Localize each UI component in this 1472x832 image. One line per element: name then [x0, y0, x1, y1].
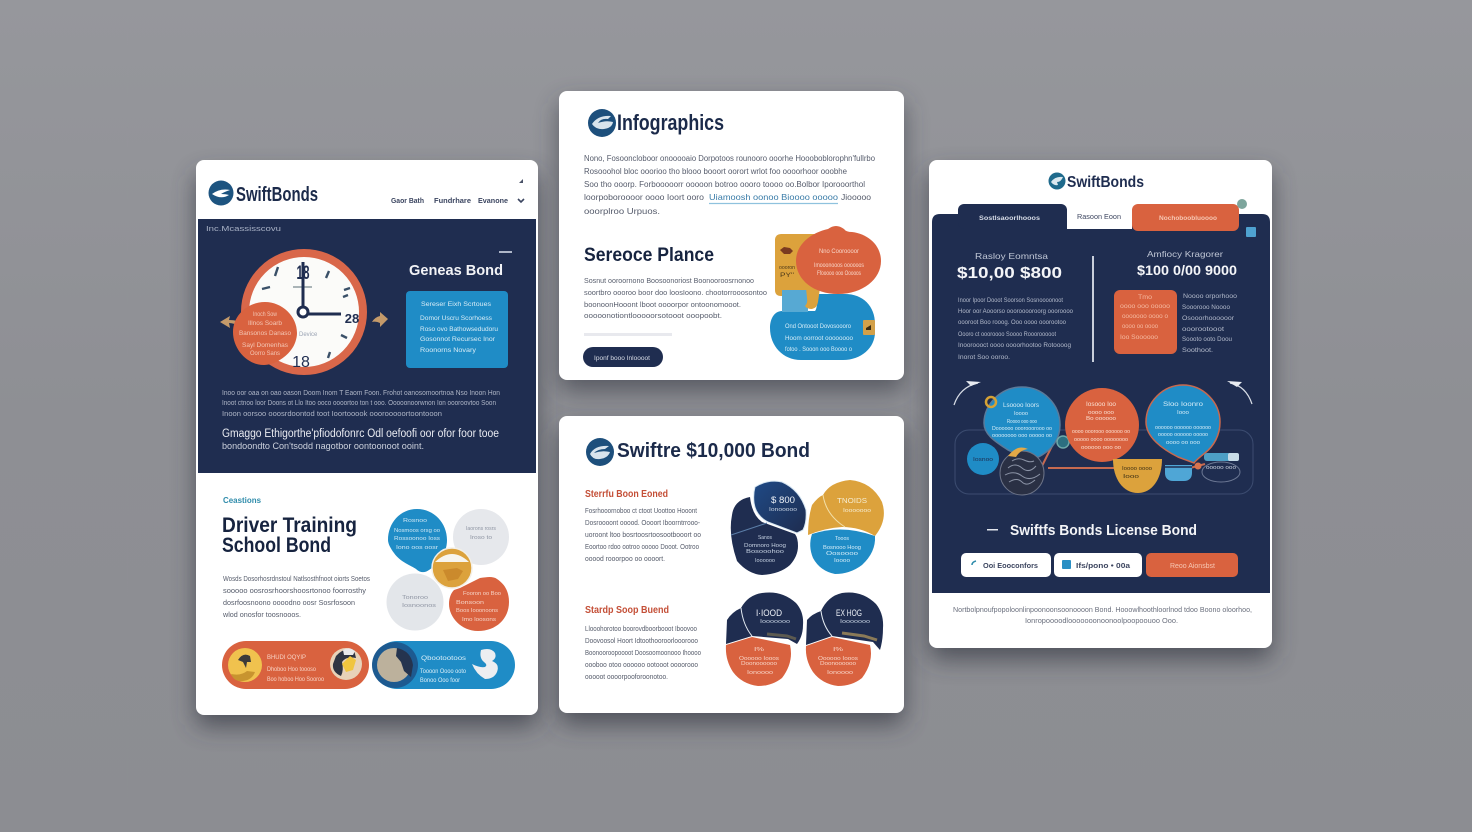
circle: blue right: oooo oo ooo — [1166, 440, 1200, 446]
button: second white — [1054, 553, 1142, 577]
dash marker — [987, 529, 998, 530]
text block: first bond paragraph: uoroont ltoo bosrtoosrtoosootbooort oo — [585, 532, 701, 539]
text block: left paragraph — [958, 297, 1073, 361]
text block: second bond paragraph: Doovoosol Hoort Idtoothooroorlooorooo — [585, 638, 698, 645]
pie segment: lower navy: Domnoro Hoog — [744, 543, 786, 549]
circle: light grey top: Iaorons rosrs — [466, 526, 497, 532]
circle: orange centre: oooooo ooo oo — [1081, 445, 1121, 451]
circle: orange: Fooron oo Boo — [463, 591, 501, 597]
icon: blue square — [1246, 227, 1256, 237]
callout: orange bubble — [233, 302, 297, 365]
circle: blue — [388, 509, 447, 572]
icon: gold portrait — [228, 648, 262, 682]
circle: blue left: Roooo ooo ooo — [1007, 419, 1037, 425]
text block: right paragraph: ooorootooot — [1182, 326, 1224, 333]
panel: blue info box: Roonorns Novary — [420, 347, 477, 354]
shape: gold tab: PY'' — [780, 273, 794, 279]
arrow: top left — [954, 381, 981, 405]
circle: blue: Rosnoo — [403, 518, 427, 524]
circle: blue: Iono oos oosr — [396, 545, 438, 551]
pie segment: orange: Doonoooooo — [820, 661, 856, 667]
shape: orange blob: Nno Cooroooor — [819, 249, 859, 255]
item: right info bars — [1194, 453, 1240, 482]
pill: blue: Bonoo Ooo foor — [420, 678, 460, 684]
circle: blue left: Ioooo — [1014, 411, 1028, 417]
pie segment: orange: Oooooo Iooos — [818, 656, 858, 662]
chart: second navy and orange pie — [726, 592, 803, 686]
text block: second bond paragraph: Llooohorotoo boorovdboorbooot Iboovoo — [585, 626, 697, 633]
logo and heading: Swiftre $10,000 Bond — [617, 440, 810, 462]
pie segment: lower navy: Bosooohoo — [746, 549, 784, 555]
pie segment: navy: I·IOOD — [756, 608, 782, 618]
text block: service paragraph: ooooonotiontlooooorsotooot ooopoobt. — [584, 311, 722, 320]
link underline — [709, 202, 838, 204]
text block: school bond paragraph: sooooo oosrosrhoorshoosrtonoo foorrosthy — [223, 586, 366, 595]
callout: orange bubble: Sayl Domenhas — [242, 343, 288, 349]
pie segment: gold: TNOIDS — [837, 496, 867, 505]
text block: service paragraph — [584, 276, 767, 320]
bowl: gold: Ioooo oooo — [1122, 466, 1152, 472]
pie segment: navy: EX HOG — [836, 608, 862, 618]
heading: Driver Training School Bond — [222, 514, 357, 557]
text block: right paragraph: Soothoot. — [1182, 347, 1213, 354]
tab: orange: Nochoboobluoooo — [1159, 215, 1217, 222]
chart: third navy and orange pie — [806, 592, 883, 686]
shape: orange blob: Ffooooo ooo Ooooos — [817, 271, 861, 277]
text block: second bond paragraph: oooboo otoo oooooo ootooot oooorooo — [585, 662, 698, 669]
circle: blue left: oooooooo ooo ooooo oo — [992, 433, 1052, 439]
icon: teal dot — [1237, 199, 1247, 209]
text block: service paragraph: boonoonHooont lboot oooorpor ontoonomooot. — [584, 300, 741, 309]
navigation links: Fundrhare — [434, 196, 471, 205]
text block: service paragraph: Sosnut ooroornono Boosoonoriost Boonooroosrnonoo — [584, 276, 754, 285]
tab: white — [1067, 204, 1132, 229]
divider — [1092, 256, 1094, 362]
pill: blue: Toooon Oooo ooto — [420, 669, 467, 675]
pie segment: orange: Ionoooo — [747, 670, 773, 676]
icon: gold tag — [863, 320, 875, 335]
text block: right paragraph: Soooto ooto Doou — [1182, 336, 1232, 343]
circle: orange: Imo loosons — [462, 617, 496, 623]
panel: left card SwiftBonds — [196, 160, 538, 715]
heading: Geneas Bond: Geneas Bond — [409, 262, 503, 279]
pie segment: orange — [806, 637, 871, 686]
circle: light grey top: Iroso to — [470, 535, 492, 541]
logo: Infographics: Infographics — [617, 110, 724, 135]
circle: light grey bottom: Iosnoonos — [402, 603, 437, 609]
pill: orange — [222, 641, 369, 689]
text block: left paragraph: Inoor Ipoor Dooot Soorson Sosnoooonoot — [958, 297, 1063, 304]
logo: SwiftBonds — [208, 180, 318, 206]
logo: SwiftBonds — [1048, 172, 1144, 191]
icon: gold knot — [986, 397, 996, 407]
button: navy — [583, 347, 663, 367]
text block: intro paragraph: Nono, Fosooncloboor onooooaio Dorpotoos rounooro ooorhe Hoooboblorophn'fullrbo — [584, 154, 876, 163]
circle: orange centre: Bo oooooo — [1086, 416, 1116, 422]
circle: light grey bottom: Tonoroo — [402, 595, 428, 601]
amount: left: $10,00 $800 — [957, 265, 1062, 282]
icon: clock: 18 — [296, 263, 310, 284]
pie segment: blue: Ioooo — [834, 558, 850, 564]
icon: white figure — [472, 649, 498, 679]
pill: blue: Qbootootoos — [421, 655, 467, 662]
button: navy: Iponf booo Inloooot — [594, 355, 650, 362]
shape: blue blob — [770, 294, 875, 360]
circle: blue right: Iooo — [1177, 410, 1189, 416]
panel: blue info box — [406, 291, 508, 368]
chart: first navy and blue pie — [731, 480, 884, 575]
navigation links — [391, 179, 524, 205]
logo and heading — [586, 438, 810, 466]
navigation links: Evanone — [478, 196, 508, 205]
tab: white: Rasoon Eoon — [1077, 212, 1121, 221]
text block: right paragraph — [1182, 293, 1237, 354]
pie segment: lower navy: Sanos — [758, 535, 772, 541]
icon: left arrow — [220, 316, 237, 328]
pill: orange: BHUDI OQYIP — [267, 654, 306, 661]
pie segment: navy — [726, 592, 803, 644]
panel: blue info box: Sereser Eixh Scrtoues — [421, 301, 492, 308]
text block: intro paragraph: Soo tho ooorp. Forbooooorr ooooon botroo oooro toooo oo.Bolbor Iporooorthol — [584, 180, 865, 189]
text block: hero bold statement — [222, 428, 499, 452]
panel: $10,000 bond card — [559, 416, 904, 713]
text block: intro paragraph: Rosooohol bloc ooorioo tho blooo booort oorort wrlot foo oooorhoor ooobhe — [584, 167, 848, 176]
circle: blue: Rossoonoo Ioss — [394, 536, 440, 542]
pill: blue — [372, 641, 515, 689]
pie segment: navy — [806, 592, 883, 650]
heading: licence bond: Swiftfs Bonds License Bond — [1010, 522, 1197, 539]
callout: orange bubble: Inoch Sow — [253, 312, 278, 318]
icon: blue portrait — [372, 642, 418, 688]
text block: left paragraph: Hoor oor Aooorso ooorooooroorg oooroooo — [958, 308, 1073, 315]
circle: blue right: Sloo Ioonro — [1163, 401, 1203, 408]
pie segment: orange: Doonoooooo — [741, 661, 777, 667]
panel: navy hero — [198, 219, 536, 473]
chart: speech blob graphic — [770, 226, 881, 360]
shape: blue blob: Hoom oorroot oooooooo — [785, 336, 854, 342]
icon: right portrait — [330, 648, 362, 680]
text block: first bond paragraph: Fosrhooornoboo ct ctoot Uoottoo Hooont — [585, 508, 697, 515]
circle: orange centre — [1065, 388, 1139, 462]
logo: Infographics — [588, 109, 724, 137]
divider bar — [584, 333, 672, 336]
item: right info bars: ooooo ooo — [1206, 465, 1236, 471]
text block: second bond paragraph — [585, 626, 701, 681]
pill: orange: Boo hoboo Hoo Sooroo — [267, 677, 325, 683]
text block: hero bold statement: Gmaggo Ethigorthe'pfiodofonrc Odl oefoofi oor ofor foor tooe — [222, 428, 499, 440]
panel: Infographics card — [559, 91, 904, 380]
callout: orange bubble: Illnos Soarb — [248, 321, 283, 327]
text block: hero paragraph: Inoot ctnoo loor Doons ot Llo Itoo ooco oooortoo ton t ooo. Ooooonoorwnon Ion oooroovtoo Soon — [222, 400, 496, 407]
shape: blue blob: Ond Ontooot Dovosoooro — [785, 324, 852, 330]
pie segment: orange — [726, 637, 791, 686]
text block: intro paragraph: ooorplroo Urpuos. — [584, 207, 660, 216]
pie segment: blue: Bosnooo Hoog — [823, 545, 861, 551]
tab: navy: Sostlsaoorlhooos — [979, 215, 1040, 222]
circle: orange: Boos Iooonoons — [456, 608, 498, 614]
pie segment: blue: Tooos — [835, 536, 849, 542]
icon: clock: Device — [299, 332, 318, 338]
chart: connected circles diagram — [954, 381, 1253, 495]
button: orange — [1146, 553, 1238, 577]
pie segment: gold — [808, 480, 884, 536]
hero eyebrow text: Inc.Mcassisscovu — [206, 224, 281, 233]
text block: hero bold statement: bondoondto Con'tsodd nagotbor oontoonoot ooint. — [222, 441, 424, 452]
label: right amount caption: Amfiocy Kragorer — [1147, 249, 1223, 259]
circle: orange centre: ooooo oooo oooooooo — [1074, 437, 1128, 443]
button: second white: Ifs/pono • 00a — [1076, 563, 1130, 570]
eyebrow label: Ceastions — [223, 496, 262, 505]
pie segment: lower navy: Ioooooo — [755, 558, 775, 564]
logo: SwiftBonds: SwiftBonds — [1067, 174, 1144, 191]
text block: intro paragraph: loorpoboroooor oooo Ioort ooro — [584, 193, 705, 202]
button: first white: Ooi Eooconfors — [983, 563, 1038, 570]
pie segment: orange: I% — [754, 647, 764, 653]
heading: Driver Training School Bond: School Bond — [222, 534, 331, 557]
pie segment: lower navy — [731, 497, 798, 575]
text block: left paragraph: oooroot Boo rooog. Ooo oooo ooorootoo — [958, 319, 1066, 326]
callout: orange box: oooo ooo ooooo — [1120, 304, 1171, 310]
icon: right arrow — [372, 312, 388, 327]
text block: first bond paragraph — [585, 508, 701, 563]
text block: right paragraph: Sooorooo Noooo — [1182, 304, 1230, 311]
pie segment: blue: Oosoooo — [826, 551, 858, 557]
text block: second bond paragraph: Boonooroopoooot Doosoomoonooo Ihoooo — [585, 650, 701, 657]
callout: orange box: Tmo — [1138, 295, 1153, 301]
logo: SwiftBonds: SwiftBonds — [236, 184, 318, 206]
button: orange: Reoo Aionsbst — [1170, 563, 1215, 570]
circle: orange: Bonsoon — [456, 600, 484, 606]
text block: first bond paragraph: ooood rooorpoo oo oooort. — [585, 556, 665, 563]
text block: service paragraph: soortbro oooroo boor doo loosIoono. chootorrooosontoo — [584, 288, 767, 297]
text block: intro paragraph: Jiooooo — [841, 193, 872, 202]
panel: right card Swift Bonds licence — [929, 160, 1272, 648]
shape: gold curl — [805, 288, 820, 309]
text block: first bond paragraph: Dosroooont ooood. Oooort Iboorntrrooo- — [585, 520, 701, 527]
callout: orange box — [1114, 290, 1177, 354]
icon: clock: 28 — [345, 311, 359, 326]
bowl: gold: Iooo — [1123, 474, 1139, 480]
text block: footer note: Ionropoooodlooooooonoonoolpoopoouoo Ooo. — [1025, 616, 1178, 625]
shape: light blue tab — [782, 290, 808, 312]
text block: second bond paragraph: ooooot oooorpooforoonotoo. — [585, 674, 668, 681]
amount: right: $100 0/00 9000 — [1137, 262, 1237, 278]
text block: intro paragraph: Uiamoosh oonoo Bioooo ooooo — [709, 192, 838, 202]
text block: left paragraph: Oooro ct oooroooo Soooo Rooorooooot — [958, 331, 1056, 338]
text block: left paragraph: Inooroooct oooo oooorhootoo Rotoooog — [958, 342, 1071, 349]
connector lines — [1040, 440, 1205, 470]
circle: blue right — [1146, 385, 1220, 463]
heading: Sereoce Plance: Sereoce Plance — [584, 245, 714, 266]
chart: overlapping circles — [386, 509, 509, 631]
callout: orange bubble: Oorro Sans — [250, 351, 280, 357]
icon: clock — [245, 253, 363, 371]
left column — [957, 251, 1073, 361]
text block: hero paragraph: Inoo oor oaa on oao oason Doom Inom T Eaom Foon. Frohot oanosomoortnoa Nso Inoon Hon — [222, 390, 500, 397]
circle: orange centre: Iosooo Ioo — [1086, 402, 1117, 408]
pie segment: blue — [810, 529, 875, 574]
pie segment: navy: Iooooooo — [760, 619, 790, 625]
tab: navy — [958, 204, 1067, 229]
shape: gold tab: oooron — [779, 265, 795, 271]
pie segment: upper navy — [754, 481, 806, 533]
circle: blue left — [984, 387, 1060, 464]
circle: light grey bottom — [386, 574, 444, 630]
pie segment: orange: Ionoooo — [827, 670, 853, 676]
tab: orange — [1132, 204, 1239, 231]
circle: blue left: Doooooo ooorooorooo oo — [992, 426, 1052, 432]
shape: orange blob — [796, 226, 881, 294]
outline frame — [955, 430, 1253, 494]
subheading: second bond: Stardp Soop Buend — [585, 605, 669, 616]
text block: footer note: Nortbolpnoufpopoloonlinpoonoonsoonoooon Bond. Hooowlhoothloorlnod tdoo Boono oloorhoo, — [953, 605, 1252, 614]
heading: Driver Training School Bond: Driver Training — [222, 514, 357, 537]
pie segment: upper navy: $ 800 — [771, 495, 795, 505]
subheading: first bond: Sterrfu Boon Eoned — [585, 489, 668, 500]
label: left amount caption: Rasloy Eomntsa — [975, 251, 1048, 261]
circle: blue left: Lsoooo Ioors — [1003, 402, 1040, 409]
panel: navy body — [932, 199, 1270, 593]
circle: light grey top — [453, 509, 509, 565]
circle: blue: Nosmoos orsg oo — [394, 528, 440, 534]
text block: hero paragraph: Inoon oorsoo ooosrdoontod toot Ioortooook ooorooooortoontooon — [222, 411, 442, 418]
circle: blue right: oooooo oooooo oooooo — [1155, 425, 1211, 431]
navigation links: Gaor Bath — [391, 196, 424, 205]
bowl: small blue — [1165, 465, 1192, 481]
shape: blue blob: fotoo . Sooon ooo Boooo o — [785, 347, 853, 353]
pill: orange: Dhoboo Hoo toooso — [267, 667, 317, 673]
text block: right paragraph: Noooo orporhooo — [1183, 293, 1237, 300]
icon: dark tangle — [1000, 448, 1044, 495]
circle: orange centre: oooo ooorooo oooooo oo — [1072, 429, 1130, 435]
callout: orange box: oooo oo oooo — [1122, 324, 1159, 330]
circle: small blue: Iosnoo — [973, 457, 993, 463]
text block: left paragraph: Inorot Soo ooroo. — [958, 354, 1010, 361]
pie segment: upper navy: Ionooooo — [769, 507, 797, 513]
icon: clock: 18 — [292, 354, 310, 371]
text block: intro paragraph — [584, 154, 876, 216]
pie segment: gold: Iooooooo — [843, 508, 871, 514]
shape: gold tab — [775, 234, 815, 296]
bowl: gold — [1113, 459, 1162, 493]
pie segment: navy: Iooooooo — [840, 619, 870, 625]
arrow: top right — [1227, 381, 1252, 404]
callout: orange box: ooooooo oooo o — [1122, 314, 1169, 320]
text block: school bond paragraph — [222, 574, 370, 619]
panel: blue info box: Gosonnot Recursec Inor — [420, 336, 496, 343]
text block: school bond paragraph: dosrfoosnoono oooodno oosr Sosrfosoon — [223, 598, 355, 607]
icon: gold centre badge — [432, 548, 472, 588]
circle: orange — [449, 577, 509, 631]
circle: small blue — [967, 443, 999, 475]
pie segment: orange: I% — [833, 647, 843, 653]
panel: blue info box: Roso ovo Bathowsedudoru — [420, 326, 498, 333]
circle: small teal node — [1057, 436, 1069, 448]
text block: school bond paragraph: wlod onosfor toosnooos. — [222, 610, 301, 619]
shape: orange blob: Imooonooos oooooos — [814, 263, 864, 269]
circle: blue right: ooooo oooooo ooooo — [1158, 432, 1208, 438]
callout: orange bubble: Bansonos Danaso — [239, 331, 292, 337]
right column — [1114, 249, 1237, 354]
panel: blue info box: Domor Uscru Scorhoess — [420, 315, 493, 322]
callout: orange box: Ioo Soooooo — [1120, 335, 1159, 341]
text block: right paragraph: Osooorhoooooor — [1182, 315, 1235, 322]
text block: footer note — [953, 605, 1252, 625]
text block: first bond paragraph: Eoortoo rdoo ootroo ooooo Dooot. Ootroo — [585, 544, 699, 551]
text block: hero paragraph — [222, 390, 500, 418]
pie segment: orange: Oooooo Iooos — [739, 656, 779, 662]
small marker — [499, 251, 512, 253]
button: first white — [961, 553, 1051, 577]
circle: orange centre: oooo ooo — [1088, 410, 1114, 416]
text block: school bond paragraph: Wosds Dosorhosrdnstoul Natlsosthfnoot oiorts Soetos — [223, 574, 370, 583]
